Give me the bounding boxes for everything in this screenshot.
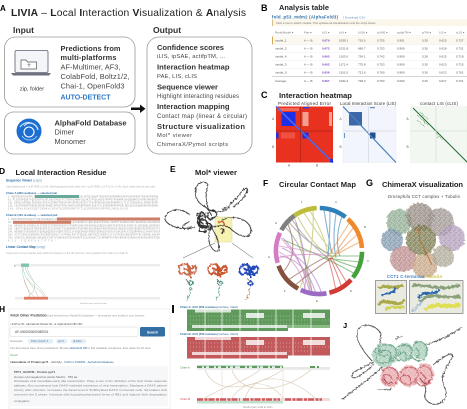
panel A: LIVIA overview [0, 4, 252, 154]
chain B sequence block [187, 337, 330, 359]
output feature list [157, 43, 247, 148]
panel label F: F [263, 178, 268, 188]
heatmap: local interaction score [340, 101, 397, 162]
disordered gray tails [342, 325, 462, 404]
chain labels: G [268, 255, 270, 259]
output feature list: ChimeraX/Pymol scripts [157, 142, 228, 148]
heatmap: local interaction score: A [340, 117, 342, 121]
data table: 0.731 [456, 46, 464, 50]
data table: ipTM ▾ [422, 30, 432, 34]
heatmap heading: Interaction heatmap [279, 91, 352, 100]
dimer availability note: Not all proteins have dimer predictions. Browse AlphaFold DB to find available complexes, then paste the ID here. [10, 346, 151, 350]
output feature list: Highlight interacting residues [157, 94, 239, 100]
chain labels: D [350, 289, 352, 293]
chain B title: Chain B: AUX (559 residues) (surface, Clash) [180, 332, 238, 336]
input box: AlphaFold database [4, 112, 135, 154]
database text [54, 118, 126, 146]
chords [278, 210, 361, 294]
panel label A: A [0, 4, 6, 13]
data table: 0.30 [422, 38, 428, 42]
example chips: dj-Data [73, 339, 82, 343]
search button [140, 327, 165, 336]
data table: 0.737 [456, 38, 464, 42]
circular map heading: Circular Contact Map [279, 180, 356, 189]
panel F: circular contact map [263, 178, 369, 303]
panel label E: E [170, 164, 176, 174]
title: LIVIA – Local Interaction Visualization & Analysis [11, 8, 246, 19]
data table: LIS ▾ [439, 30, 446, 34]
sequence description: Light background = cLIR (PAE ≤ 12 Å); Dark background with white text = cLIR (PAE ≤ 12 Å & Cb ≤ 8 Å). Each chain uses its own color. [6, 186, 156, 188]
data table: A — B [304, 79, 313, 83]
protein description: pathway. Also counteracts host DAXX-mediated repression of viral transcription. Displaces a DAXX partner [14, 384, 167, 388]
data table: 0.701 [456, 70, 464, 74]
residue heading: Local Interaction Residue [16, 168, 106, 177]
input heading: Input [13, 25, 34, 35]
data table: 719.0 [358, 38, 366, 42]
data table: 0.618 [439, 46, 447, 50]
chain B sequence: 361 DSEDYSLSEEGQELSDEDDEVYQVTVYQAGESDTDSFEEDPEISLADYWKCTSCNEMNPPLPSHCNRCWALRENWLPEDKGKDKGEISEK [8, 236, 161, 240]
data table: 0.30 [422, 62, 428, 66]
linear contact map between chains [180, 365, 330, 409]
output feature list: Interaction mapping [157, 102, 230, 111]
data table: 0.715 [456, 62, 464, 66]
data table: 721.6 [358, 70, 366, 74]
output box [147, 37, 252, 154]
output feature list: Mol* viewer [157, 133, 192, 139]
complex caption: Drosophila CCT complex + Tubulin [388, 194, 461, 199]
info banner [272, 20, 467, 26]
data table: 1103.6 [339, 54, 348, 58]
done status: Done! [10, 353, 18, 357]
data table: 0.991 [397, 38, 405, 42]
linear contact map between chains: Chain B [180, 397, 190, 401]
data table: 1171.4 [339, 62, 348, 66]
output feature list: PAE, LIS, cLIS [157, 74, 197, 80]
data table: actifpTM ▾ [397, 30, 411, 34]
panel label C: C [261, 90, 268, 100]
chain A sequence: 61 PLSSSVPSQKTYQGSYGFRLGFLHSGTAKSVTCTYSPALNKMFCQLAKTCPVQLWVDSTPPPGTRVRAMAIYKQSQHMTEVVRRCPHHERCS [8, 198, 159, 201]
data table: Average [275, 79, 286, 83]
output feature list: Contact map (linear & circular) [157, 114, 247, 120]
platform list: Predictions from [60, 44, 121, 53]
info banner: Click a row to switch models. This updates all visualizations and the script below. [276, 21, 376, 25]
data table: Pair ▾ [304, 30, 312, 34]
data table: 0.990 [397, 62, 405, 66]
platform list: AF-Multimer, AF3, [60, 62, 120, 72]
data table: 0.613 [439, 62, 447, 66]
example chips: Filter protein 3 [31, 339, 49, 343]
data table: 0.28 [422, 54, 428, 58]
data table: model_2 [275, 46, 287, 50]
fetch title: Fetch Dimer Prediction Data fetched from AlphaFold Database — all analysis runs locally in your browser [10, 314, 145, 318]
highlight box [215, 217, 232, 242]
chain A sequence: 121 DSDGLAPPQHLIRVEGNLRVEYLDDRNTFRHSVVVPYEPPEVGSDCTTIHYNYMCNSSCMGGMNRRPILTIITLEDSSGNLLGRNSFEVRV [8, 201, 159, 204]
data table: 0.672 [322, 46, 330, 50]
example chips [10, 339, 86, 344]
platform list: multi-platforms [60, 53, 116, 62]
data table: 686.7 [358, 46, 366, 50]
chain labels: F [284, 289, 286, 293]
heatmap: contact LIS: B [406, 145, 409, 149]
protein description: and enter the S phase. Interacts with hypophosphorylated forms of RB1 and induces their degradation [14, 392, 167, 396]
heatmap: contact LIS [406, 101, 467, 162]
platform list: Chai-1, OpenFold3 [60, 82, 124, 90]
data table: 0.656 [322, 70, 330, 74]
icon: AlphaFold swirl [16, 118, 42, 144]
data table: 728.4 [358, 79, 366, 83]
chain labels: 1 [301, 200, 303, 204]
platform list: ColabFold, Boltz1/2, [60, 72, 130, 81]
data table: 0.990 [397, 70, 405, 74]
linear contact map [14, 264, 160, 305]
chain A green domain [372, 341, 428, 367]
data table: 0.755 [377, 38, 385, 42]
data table: 734.1 [358, 54, 366, 58]
chain A sequence: 181 CACPGRDRRTEEENLRKKGEPHHELPPGSTKRALPNNTSSSPQPKKKPLDGEYFTLQIRGRERFEMFRELNEALELKDAQAGKEPGGSRAH [8, 204, 159, 207]
fetch panel frame [9, 309, 170, 409]
database text: Dimer [54, 128, 75, 136]
CCT1 tubulin caption: CCT1 C-terminus Tubulin [387, 274, 442, 279]
core highlight colours [218, 221, 224, 233]
heatmap: local interaction score: B [340, 145, 342, 149]
heatmap: local interaction score: Local Interaction Score (LIS) [340, 101, 397, 106]
CCT complex structure [378, 200, 465, 280]
search input [10, 327, 138, 336]
domain texture [372, 338, 434, 390]
data table: 0.662 [322, 62, 330, 66]
data table: 0.617 [439, 79, 447, 83]
darker shaded contacts [384, 378, 430, 384]
data table: 0.615 [439, 54, 447, 58]
chain labels: H [275, 221, 277, 225]
ring segments [276, 208, 362, 294]
chain A title: Chain A: AUX (559 residues) (surface, Clash) [180, 305, 238, 309]
data table: 1101.0 [339, 70, 348, 74]
zip, folder caption: zip, folder [20, 86, 44, 92]
heatmap: predicted aligned error: Predicted Aligned Error [278, 101, 331, 106]
data table: ipSAE ▾ [377, 30, 388, 34]
output feature list: Interaction heatmap [157, 62, 230, 72]
protein description: Stimulates viral immediate-early (IE) transcription. Plays a role in the inhibition of the host innate response [14, 379, 167, 383]
panel label B: B [261, 3, 268, 13]
data table: 1092.4 [339, 79, 349, 83]
linear contact map between chains: Scroll to pan; scroll to zoom [243, 406, 272, 409]
input box: multi-platform predictions [4, 37, 135, 107]
chain A sequence: Chain A (393 residues) — selected pair [6, 191, 58, 195]
data table: 0.990 [397, 46, 405, 50]
data table: cLIS ▾ [456, 30, 465, 34]
model name: fold_p53_mdm2 (AlphaFold3) [272, 14, 339, 20]
Mol* heading: Mol* viewer [195, 168, 237, 177]
chain A sequence: 241 SSHLKSKKGQSTSRHKKLMFKTEGPDSDMEYFTLQIRGRERFEMFRELNEALELKD [8, 207, 129, 210]
linear contact map subtitle: Linear Contact Map (copy) [6, 245, 45, 249]
data table: 775.8 [358, 62, 366, 66]
platform list: AUTO-DETECT [60, 94, 111, 102]
download link: ⭳ Download CSV [343, 16, 365, 20]
chain A sequence [6, 191, 159, 210]
zoom lines [183, 243, 253, 258]
database text: AlphaFold Database [54, 118, 126, 128]
close-up right [410, 280, 463, 314]
example chips: Examples: [10, 339, 23, 343]
protein description: Human cytomegalovirus (strain Merlin) · 559 aa [14, 375, 78, 379]
data table: 0.625 [439, 38, 447, 42]
chain B sequence: 181 YQVTVYQAGESDTDSFEEDPEISLADYWKCTSCNEMNPPLPSHCNRCWALRENWLPEDKGKDKGEISEKAKLENSTQAEEGFDVPDCKKTIV [8, 228, 161, 230]
sequence viewer subtitle: Sequence Viewer (copy) [6, 178, 42, 182]
data table: 0.667 [322, 79, 330, 83]
output feature list: Structure visualization [157, 122, 245, 131]
data table: Rank/Model ▾ [275, 30, 294, 34]
data table: 0.990 [397, 54, 405, 58]
data table: 0.753 [377, 46, 385, 50]
data table: model_0 [275, 70, 287, 74]
platform list [60, 44, 130, 102]
data table: 0.30 [422, 70, 428, 74]
chain B sequence [6, 213, 161, 242]
zoomed structure: orange middle [208, 263, 227, 300]
data table: 0.000 [397, 79, 405, 83]
chain B sequence: 1 MCNTNMSVPTDGAVTTSQIPASEQETLVRPKPLLLKLLKSVGAQKDTYTMKEVLFYLGQYIMTKRLYDEKQQHIVYCSNDLLGDLFGVPSFS [8, 218, 161, 221]
chain B sequence: 421 FQMEKKTPTK* [8, 239, 57, 242]
data table: 1021.8 [339, 46, 349, 50]
panel label I [172, 305, 174, 313]
data table: 0.721 [456, 79, 464, 83]
chain B sequence: 121 HKSDSISLSFDESLALCVIREICCERSSSSESTGTPSNPDLDAGVSEHSGDWLDQDSVSDQFSVEFEVESLDSEDYSLSEEGQELSDEDDEV [8, 224, 161, 228]
analysis table heading: Analysis table [279, 3, 329, 12]
arrow input to output [131, 104, 146, 113]
panel B: analysis table [261, 3, 467, 83]
data table: 0.665 [322, 54, 330, 58]
panel H: fetch dimer prediction [0, 304, 170, 409]
zoomed structure: blue [239, 263, 258, 300]
output feature list: iLIS, ipSAE, actifpTM, ... [157, 54, 225, 60]
data table: model_3 [275, 62, 287, 66]
chord diagram [268, 200, 369, 303]
output feature list: Sequence viewer [157, 82, 218, 92]
data table: model_4 [275, 54, 287, 58]
linear contact map: Scroll to pan; scroll to zoom [80, 302, 107, 305]
icon: laptop with folder [11, 50, 51, 76]
panel C: interaction heatmap [261, 90, 467, 168]
data table: 0.613 [439, 70, 447, 74]
panel D: local interaction residue [0, 166, 161, 305]
chain B sequence: 61 VKEHRKIYTMIYRNLVVVNQQESSDSGTSVSENRCHLEGGSDQKDLVQELQEEKPSSSHLVSRPSTSSRRRAISETEENSDELSGERQRKR [8, 221, 161, 224]
chain B sequence: 301 ACFTCAKKLKKRNKPCPVCRQPIQMIVLTYFPSNLPSTYFQVEELNKPVGDIVGNSPLVYLSTPKKGKDQVSRMTFRLSSRHGLAGEAP [8, 234, 161, 236]
input label: UniProt ID, AlphaFold Model ID, or AlphaFold DB URL [10, 322, 83, 326]
heatmap: predicted aligned error: B [272, 145, 274, 149]
data table: 0.679 [322, 38, 330, 42]
protein description: shortly after infection. Increases the basal level of SUMOylated DAXX in infected cells. Stimulates viral [14, 388, 167, 392]
close-up left [376, 280, 406, 314]
data table: iLISA ▾ [358, 30, 368, 34]
chain labels: E [316, 299, 318, 303]
data table: A — B [304, 70, 313, 74]
heatmap: predicted aligned error: B [316, 164, 318, 168]
heatmap: predicted aligned error: A [288, 164, 291, 168]
database text: Monomer [54, 137, 86, 146]
data table: 0.30 [422, 79, 428, 83]
chain A sequence block [187, 309, 330, 331]
panel I: sequence and linear map [172, 305, 330, 409]
search input: AF-0000000000082001 [15, 330, 49, 334]
panel J: dimer structure [342, 321, 462, 404]
chain A sequence: 1 MEEPQSDPSVEPPLSQETFSDLWKLLPENNVLSPLPSQAMDDLMLSPDDIEQWFTEDPGPDEAPRMPEAAPPVAPAPAAPTPAAPAPAPSW [8, 195, 159, 198]
data table: 0.753 [377, 62, 385, 66]
data table: 0.30 [422, 46, 428, 50]
linear map description: Linear arcs connect residue pairs within 8 Å distance in the 3D structure. Color gradient from chain A to chain B. [6, 252, 128, 255]
data table [272, 30, 467, 83]
ChimeraX heading: ChimeraX visualization [382, 180, 463, 189]
data table: 0.742 [377, 54, 385, 58]
linear contact map between chains: Chain A [180, 366, 190, 370]
chain labels: C [367, 259, 369, 263]
data table: iLIA ▾ [339, 30, 347, 34]
zoomed structure: orange left [179, 263, 196, 300]
protein description: PP71_HCMVM · Protein pp71 [14, 370, 56, 374]
panel G: ChimeraX visualization [366, 178, 465, 314]
data table: 0.719 [456, 54, 464, 58]
heatmap: predicted aligned error [272, 101, 333, 168]
linear contact map: A [14, 264, 16, 268]
panel label G: G [366, 178, 373, 188]
heatmap: predicted aligned error: A [272, 117, 275, 121]
output feature list: Confidence scores [157, 43, 224, 52]
chain labels: A [335, 200, 337, 204]
panel E: Mol* viewer [165, 164, 258, 300]
data table: iLIS ▾ [322, 30, 330, 34]
example chips: pp71 [58, 339, 64, 343]
data table: model_1 [275, 38, 287, 42]
chain labels [268, 200, 369, 303]
chain B sequence: 241 NDSRESCVEENDDKITQASQSQESEDYSQPSTSSSIIYSSQEDVKEFEREETQDKEESVESSLPLNAIEPCVICQGRPKNGCIVHGKTGHLM [8, 230, 161, 234]
search button: Search [147, 330, 158, 334]
heatmap: contact LIS: contact LIS (cLIS) [420, 101, 459, 106]
full-length structure cartoon [165, 182, 251, 251]
chain labels: B [364, 225, 366, 229]
output heading: Output [153, 25, 181, 35]
protein description [10, 366, 168, 406]
protein description: conjugation. [14, 399, 30, 403]
chain B red domain [380, 363, 434, 387]
data table: A — B [304, 54, 313, 58]
result title: Homodimer of Protein pp71 · (AA:AA) · UniProt: P04806 · AlphaFold Database [10, 360, 114, 364]
data table: 1059.1 [339, 38, 349, 42]
data table: A — B [304, 38, 313, 42]
panel label J: J [343, 321, 347, 330]
data table: A — B [304, 46, 313, 50]
data table: A — B [304, 62, 313, 66]
data table: 0.753 [377, 79, 385, 83]
heatmap: contact LIS: A [406, 117, 410, 121]
dense core of structure [196, 210, 216, 232]
chain B sequence: Chain B (491 residues) — selected pair [6, 213, 59, 217]
data table: 0.760 [377, 70, 385, 74]
